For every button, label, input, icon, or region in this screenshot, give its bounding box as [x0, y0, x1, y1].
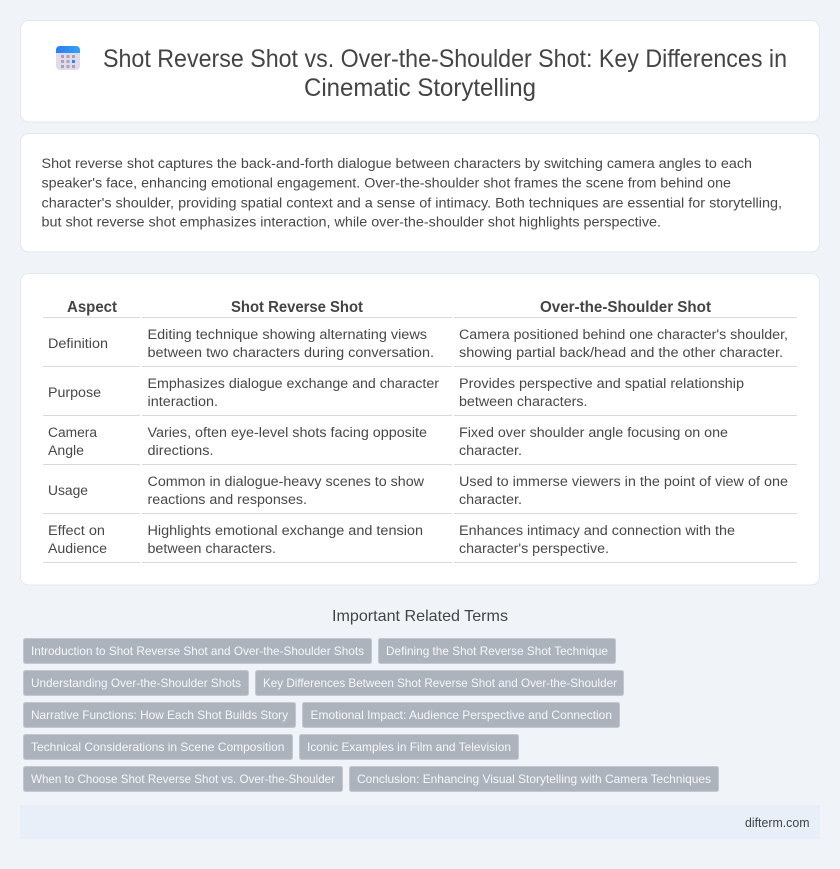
- panel: related term tags: [24, 638, 718, 792]
- row: purpose: between characters.: [459, 394, 588, 410]
- row: usage: character.: [459, 492, 522, 508]
- icon: calendar: [56, 46, 80, 70]
- row: effect on audience: between characters.: [148, 541, 276, 557]
- row: usage: [48, 474, 788, 508]
- table header: Shot Reverse Shot: [231, 299, 363, 316]
- row: definition: [48, 327, 788, 361]
- row: camera angle: Varies, often eye-level shots facing opposite: [148, 425, 427, 441]
- text block: introduction paragraph: Shot reverse shot captures the back-and-forth dialogue between characters by switching camera angles to each: [42, 156, 752, 172]
- footer bar: [20, 805, 820, 839]
- text block: introduction paragraph: character's shoulder, providing spatial context and a sense of intimacy. Both techniques are essential for storytelling,: [42, 196, 782, 212]
- row: purpose: Emphasizes dialogue exchange and character: [148, 376, 439, 392]
- row: usage: Usage: [48, 483, 88, 499]
- panel: related term tags: Understanding Over-the-Shoulder Shots: [31, 676, 241, 690]
- panel: comparison table: [20, 274, 820, 585]
- table header: Over-the-Shoulder Shot: [540, 299, 711, 316]
- table header: [67, 299, 711, 316]
- panel: related term tags: Emotional Impact: Audience Perspective and Connection: [310, 708, 612, 722]
- table header: Aspect: [67, 299, 117, 316]
- panel: introduction: [20, 134, 820, 252]
- row: camera angle: Angle: [48, 443, 84, 459]
- title: [103, 45, 787, 102]
- panel: related term tags: Key Differences Between Shot Reverse Shot and Over-the-Shoulder: [263, 676, 617, 690]
- row: definition: showing partial back/head and the other character.: [459, 345, 783, 361]
- panel: related term tags: Conclusion: Enhancing Visual Storytelling with Camera Techniques: [357, 772, 711, 786]
- panel: related term tags: Iconic Examples in Film and Television: [307, 740, 511, 754]
- header panel: [20, 20, 820, 122]
- row: usage: Common in dialogue-heavy scenes to show: [148, 474, 425, 490]
- row: purpose: Provides perspective and spatial relationship: [459, 376, 744, 392]
- row: definition: Editing technique showing alternating views: [148, 327, 427, 343]
- row: definition: between two characters during conversation.: [148, 345, 434, 361]
- heading: related terms: Important Related Terms: [332, 608, 508, 625]
- panel: related term tags: Technical Considerations in Scene Composition: [31, 740, 284, 754]
- footer bar: difterm.com: [745, 815, 810, 830]
- panel: related term tags: Defining the Shot Reverse Shot Technique: [386, 644, 608, 658]
- row: purpose: Purpose: [48, 385, 101, 401]
- title: Cinematic Storytelling: [304, 74, 536, 102]
- row: usage: Used to immerse viewers in the point of view of one: [459, 474, 788, 490]
- panel: related term tags: When to Choose Shot Reverse Shot vs. Over-the-Shoulder: [31, 772, 335, 786]
- row: purpose: interaction.: [148, 394, 218, 410]
- row: effect on audience: Highlights emotional exchange and tension: [148, 523, 423, 539]
- row: usage: reactions and responses.: [148, 492, 307, 508]
- row: effect on audience: Audience: [48, 541, 107, 557]
- text block: introduction paragraph: but shot reverse shot emphasizes interaction, while over-the-shoulder shot highlights perspective.: [42, 214, 661, 230]
- row: definition: Camera positioned behind one character's shoulder,: [459, 327, 788, 343]
- row: camera angle: [48, 425, 728, 459]
- row: effect on audience: character's perspective.: [459, 541, 609, 557]
- row: camera angle: directions.: [148, 443, 214, 459]
- row: purpose: [48, 376, 744, 410]
- title: Shot Reverse Shot vs. Over-the-Shoulder Shot: Key Differences in: [103, 45, 787, 73]
- row: effect on audience: Effect on: [48, 523, 105, 539]
- row: camera angle: Camera: [48, 425, 97, 441]
- row: definition: Definition: [48, 336, 108, 352]
- text block: introduction paragraph: [42, 156, 782, 230]
- text block: introduction paragraph: speaker's face, enhancing emotional engagement. Over-the-shoulder shot frames the scene from behind one: [42, 176, 731, 192]
- row: camera angle: Fixed over shoulder angle focusing on one: [459, 425, 728, 441]
- row: camera angle: character.: [459, 443, 522, 459]
- panel: related term tags: Introduction to Shot Reverse Shot and Over-the-Shoulder Shots: [31, 644, 364, 658]
- row: effect on audience: [48, 523, 735, 557]
- row: effect on audience: Enhances intimacy and connection with the: [459, 523, 735, 539]
- panel: related term tags: Narrative Functions: How Each Shot Builds Story: [31, 708, 288, 722]
